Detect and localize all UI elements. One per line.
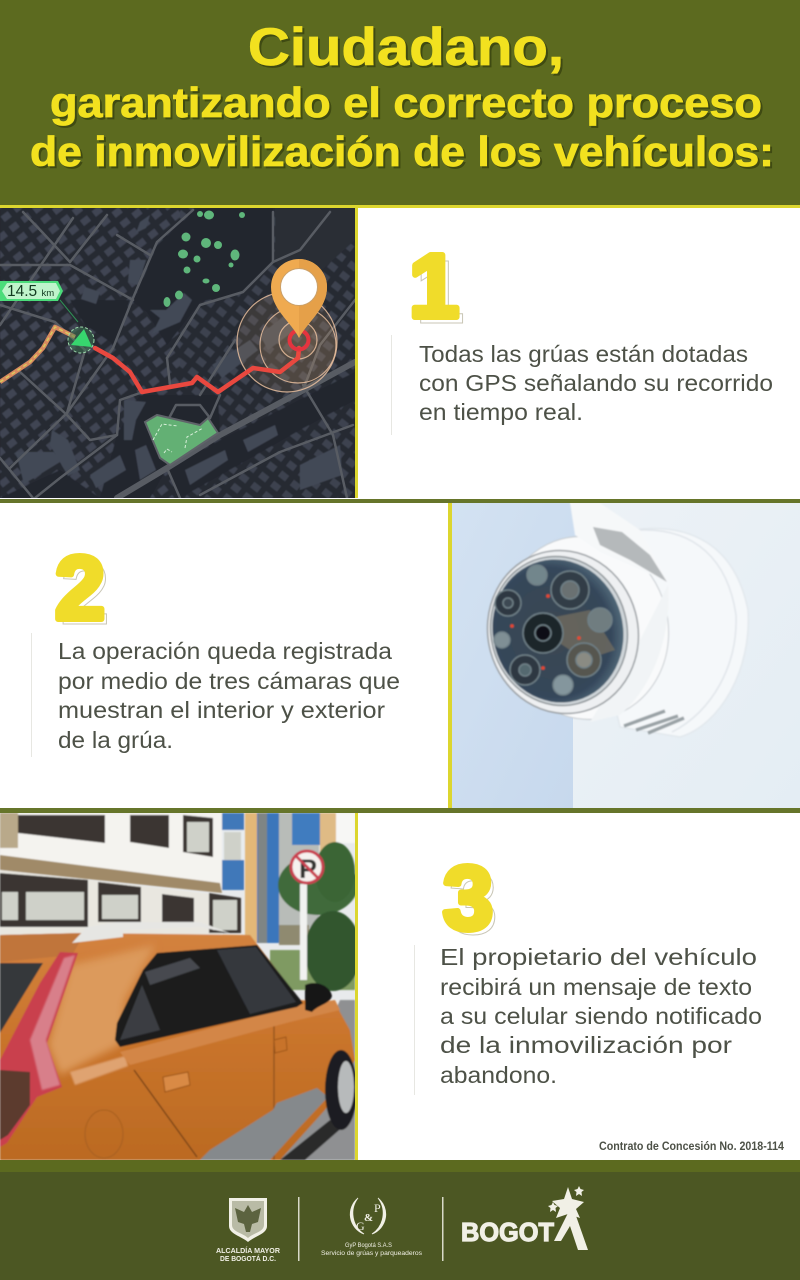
logo: Alcaldía Mayor: DE BOGOTÁ D.C.: [220, 1254, 276, 1263]
logo: Bogotá: BOGOT: [461, 1217, 554, 1247]
divider: camera edge: [448, 503, 452, 808]
camera mount: [570, 504, 650, 574]
fuel cap: [85, 1110, 123, 1158]
icon: G and P emblem: P: [374, 1201, 381, 1215]
vertical rule 1: [391, 335, 392, 435]
no parking sign: [291, 851, 323, 980]
location pin: [271, 259, 327, 350]
text: step 3: [440, 944, 762, 1088]
logo: Bogotá: [461, 1186, 588, 1250]
dome collar: [529, 536, 670, 720]
camera lens dome: [492, 558, 624, 704]
text: step 3: El propietario del vehículo: [440, 944, 757, 970]
car window: [115, 945, 303, 1047]
text: step 2: de la grúa.: [58, 727, 173, 753]
door handles: [163, 1072, 190, 1092]
no parking sign: P: [299, 854, 317, 884]
footer divider 1: [298, 1197, 300, 1261]
route: remaining: [95, 348, 299, 392]
title: de inmovilización de los vehículos:: [30, 128, 774, 175]
rear window: [0, 963, 43, 1033]
car under-shadow: [280, 1120, 345, 1160]
panel: security camera photo: [452, 503, 800, 808]
vertical rule 3: [414, 945, 415, 1095]
footer band: [0, 1160, 800, 1280]
title: [30, 18, 776, 177]
header banner: [0, 0, 800, 208]
number 2: 2: [55, 539, 105, 639]
text: step 1: con GPS señalando su recorrido: [419, 370, 773, 396]
title: Ciudadano,: [250, 20, 566, 79]
icon: G and P emblem: [350, 1198, 386, 1234]
vertical rule 2: [31, 633, 32, 757]
olive separator 1: [0, 499, 800, 503]
footer divider 2: [442, 1197, 444, 1261]
contract note: Contrato de Concesión No. 2018-114: [599, 1141, 785, 1153]
distance label: [0, 281, 63, 301]
title: de inmovilización de los vehículos:: [32, 130, 776, 177]
text: step 1: Todas las grúas están dotadas: [419, 341, 748, 367]
text: step 3: a su celular siendo notificado: [440, 1003, 762, 1029]
logo: GyP Bogotá: [321, 1198, 423, 1257]
text: step 2: por medio de tres cámaras que: [58, 668, 400, 694]
number 2: 2: [60, 544, 110, 644]
title: Ciudadano,: [248, 18, 564, 77]
empty dark areas: [133, 208, 273, 345]
destination radar rings: [237, 292, 337, 392]
distance label: 14.5 km: [7, 283, 54, 300]
wing mirror: [305, 983, 332, 1012]
number 3: 3: [448, 854, 498, 954]
logo: Alcaldía Mayor: ALCALDÍA MAYOR: [216, 1246, 281, 1255]
text: step 3: recibirá un mensaje de texto: [440, 974, 752, 1000]
buildings background: [0, 813, 222, 890]
tree and hedge: [277, 864, 355, 916]
route: travelled: [0, 327, 75, 382]
panel: GPS map: [0, 208, 355, 498]
logo: GyP Bogotá: GyP Bogotá S.A.S: [345, 1242, 393, 1249]
number 3: 3: [443, 849, 493, 949]
text: step 2: [58, 638, 400, 753]
icon: A and stars: [548, 1186, 588, 1250]
road network: [0, 210, 355, 498]
text: step 3: abandono.: [440, 1062, 557, 1088]
text: step 1: en tiempo real.: [419, 399, 583, 425]
title: garantizando el correcto proceso: [52, 81, 764, 128]
text: step 2: La operación queda registrada: [58, 638, 392, 664]
divider: map edge: [355, 208, 358, 498]
icon: coat of arms: [229, 1198, 267, 1242]
side cladding: [200, 1088, 328, 1160]
number 1: 1: [415, 243, 465, 343]
icon: G and P emblem: G: [356, 1219, 365, 1233]
vehicle marker: [60, 300, 94, 353]
roof rail: [72, 922, 230, 943]
windows: [0, 815, 241, 933]
car body: [0, 933, 355, 1160]
utility pole: [258, 813, 267, 943]
road: [280, 999, 355, 1160]
text: step 3: de la inmovilización por: [440, 1032, 732, 1058]
wheel: [325, 1050, 357, 1130]
trees: [164, 210, 245, 307]
logo: GyP Bogotá: Servicio de grúas y parqueaderos: [321, 1250, 423, 1257]
logo: Alcaldía Mayor: [216, 1198, 281, 1263]
tail light: [0, 952, 78, 1147]
building clusters: [16, 215, 342, 490]
text: step 2: muestran el interior y exterior: [58, 697, 385, 723]
olive separator 2: [0, 808, 800, 813]
lens rim: [486, 549, 640, 716]
number 1: 1: [409, 237, 459, 337]
title: garantizando el correcto proceso: [50, 79, 762, 126]
divider: photo edge: [355, 813, 358, 1160]
icon: G and P emblem: &: [364, 1212, 373, 1224]
text: step 1: [419, 341, 773, 425]
camera base: [619, 532, 747, 736]
green park: [145, 415, 218, 465]
camera vents: [624, 711, 684, 733]
panel: parked car photo: [0, 813, 361, 1160]
